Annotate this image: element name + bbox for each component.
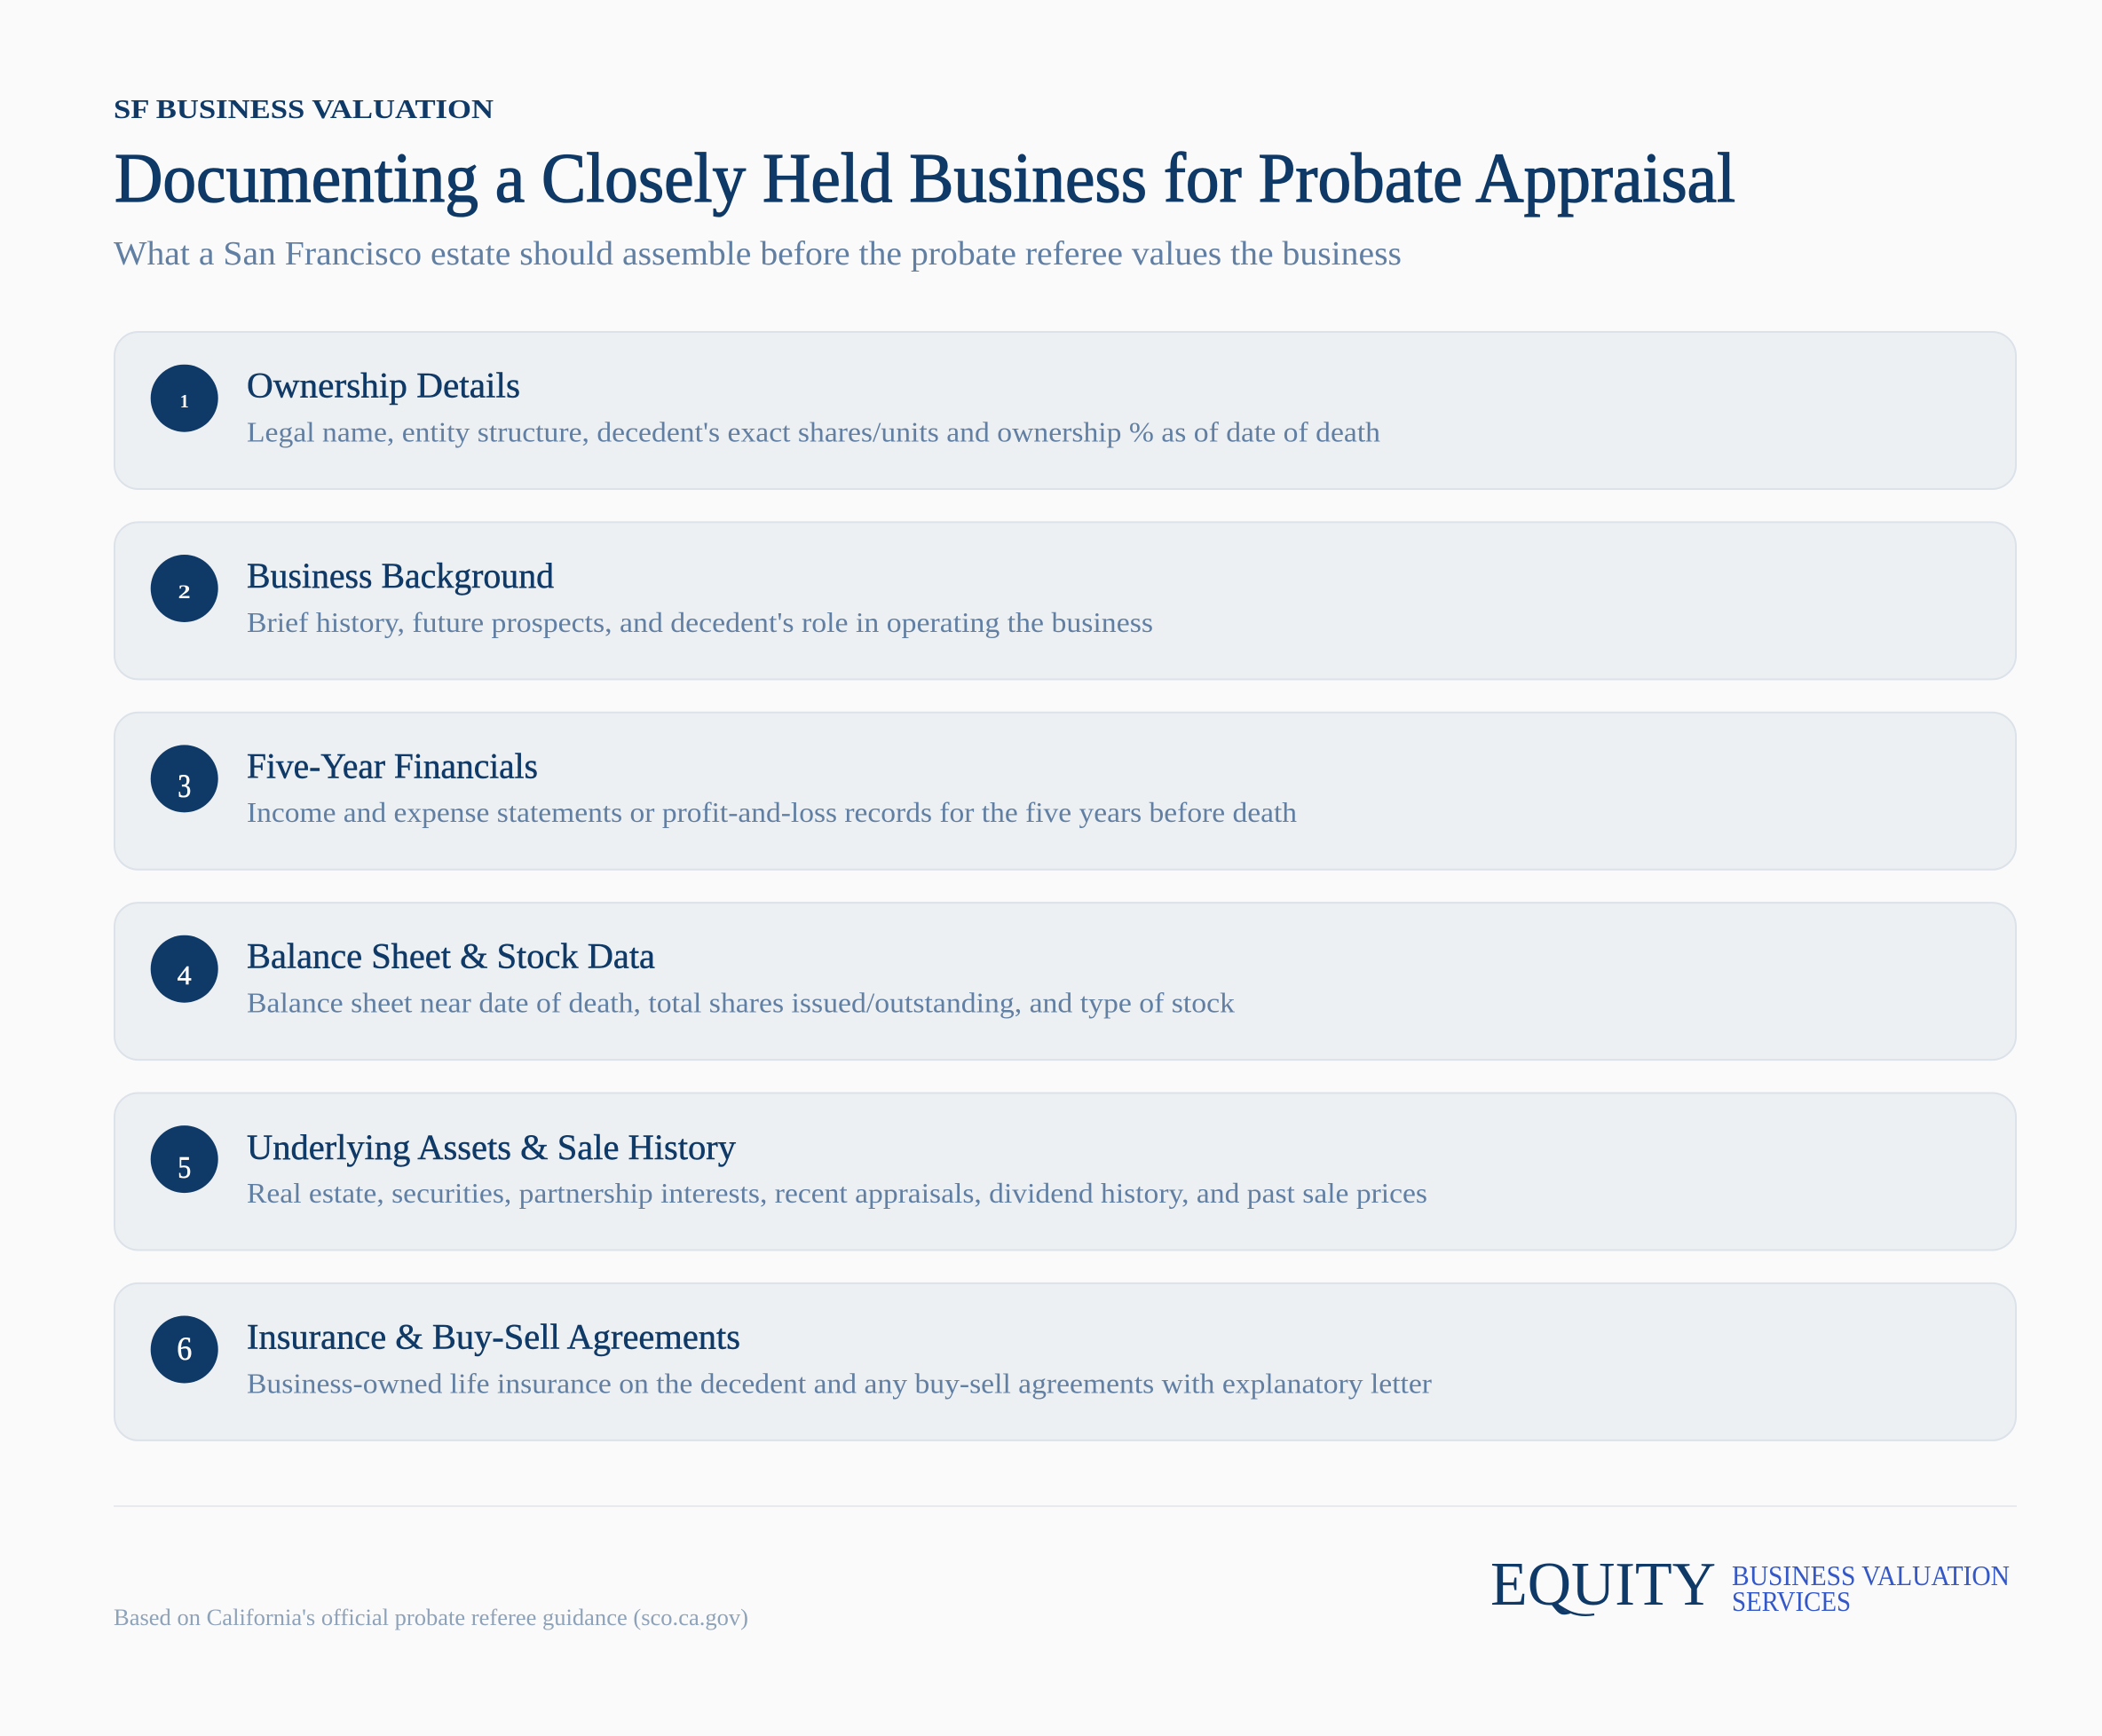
logo: Equity Business Valuation Services: SERVICES: [1732, 1585, 1851, 1617]
step 4 heading: Balance Sheet & Stock Data: [247, 936, 655, 976]
step 5 description: Real estate, securities, partnership interests, recent appraisals, dividend history, and past sale prices: [247, 1177, 1427, 1209]
number badge 1: [151, 365, 218, 432]
step 1 description: Legal name, entity structure, decedent's exact shares/units and ownership % as of date of death: [247, 415, 1380, 447]
panel: step 4 balance sheet and stock data: [115, 903, 2016, 1060]
number badge 3: [151, 745, 218, 812]
logo: Equity Business Valuation Services: BUSINESS VALUATION: [1732, 1559, 2010, 1591]
step 2 heading: Business Background: [247, 556, 554, 596]
step 2 description: Brief history, future prospects, and decedent's role in operating the business: [247, 606, 1153, 638]
panel: step 2 business background: [115, 522, 2016, 679]
number badge 5: [151, 1125, 218, 1193]
eyebrow label: SF BUSINESS VALUATION: [114, 93, 494, 124]
title: Documenting a Closely Held Business for Probate Appraisal: [115, 140, 1735, 217]
number badge 4: [151, 935, 218, 1003]
step 6 heading: Insurance & Buy-Sell Agreements: [247, 1317, 740, 1356]
number badge 2: [151, 555, 218, 622]
step 1 heading: Ownership Details: [247, 366, 520, 406]
number badge 2: 2: [178, 580, 191, 603]
number badge 4: 4: [178, 959, 192, 990]
number badge 6: 6: [177, 1331, 192, 1368]
step 3 heading: Five-Year Financials: [247, 746, 538, 785]
logo: Equity Business Valuation Services: EQUITY: [1490, 1551, 1716, 1619]
step 4 description: Balance sheet near date of death, total shares issued/outstanding, and type of stock: [247, 987, 1235, 1019]
panel: step 1 ownership details: [115, 332, 2016, 489]
step 6 description: Business-owned life insurance on the decedent and any buy-sell agreements with explanatory letter: [247, 1367, 1432, 1399]
logo: Equity Business Valuation Services: [1490, 1551, 2010, 1619]
step 3 description: Income and expense statements or profit-and-loss records for the five years before death: [247, 796, 1297, 828]
panel: step 5 underlying assets and sale history: [115, 1093, 2016, 1250]
number badge 1: 1: [180, 391, 189, 412]
subtitle: What a San Francisco estate should assemble before the probate referee values the business: [114, 235, 1402, 272]
source note: Based on California's official probate referee guidance (sco.ca.gov): [114, 1605, 748, 1630]
number badge 3: 3: [178, 769, 191, 805]
step 5 heading: Underlying Assets & Sale History: [247, 1127, 736, 1167]
panel: step 6 insurance and buy-sell agreements: [115, 1283, 2016, 1440]
number badge 6: [151, 1315, 218, 1383]
number badge 5: 5: [178, 1150, 191, 1185]
panel: step 3 five-year financials: [115, 713, 2016, 870]
